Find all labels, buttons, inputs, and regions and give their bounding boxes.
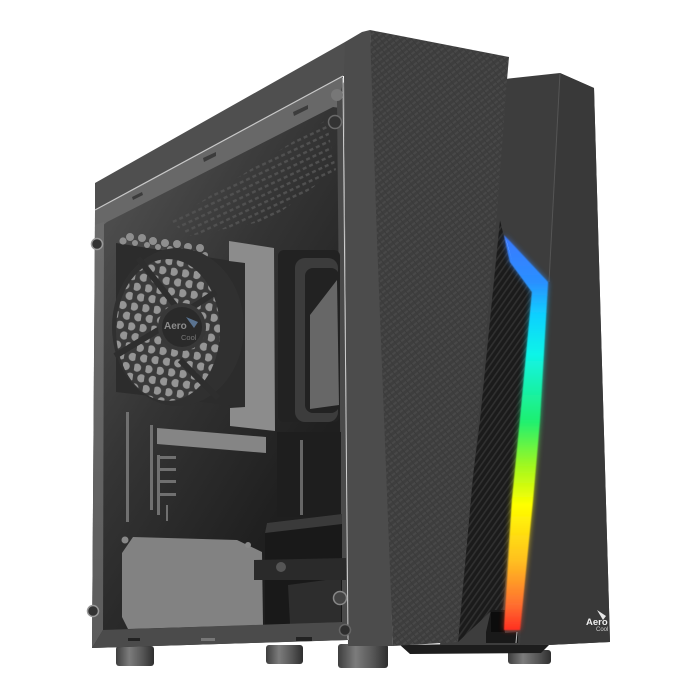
right frame [337, 82, 348, 640]
drive cage [254, 514, 346, 626]
light glow [504, 235, 548, 630]
logo: Aerocool front: Aero [586, 617, 608, 628]
right front panel [440, 73, 610, 645]
front intake frame [278, 250, 340, 422]
dark base under light bar [486, 610, 518, 643]
top frame strip [95, 76, 343, 232]
fan logo [164, 317, 198, 342]
bottom frame [92, 622, 348, 648]
illustration: PC tower case [86, 30, 610, 668]
front pillar [344, 30, 393, 646]
seam line [549, 73, 560, 282]
fan mount plate [116, 243, 245, 407]
logo: Aerocool front [586, 610, 608, 633]
perforated top panel [170, 120, 336, 236]
fan [112, 248, 220, 401]
lower right panel [277, 432, 341, 517]
fan grille holes [116, 259, 220, 401]
expansion slot lines [126, 412, 176, 522]
left frame [92, 222, 104, 648]
drive bay cutout [122, 537, 263, 629]
fan logo: Aero [164, 321, 187, 332]
thumbscrews [88, 89, 350, 636]
feet [116, 644, 551, 668]
light strip [504, 235, 548, 630]
glass side panel [92, 76, 348, 648]
cutout bar [229, 241, 275, 431]
top side band [95, 42, 345, 211]
expansion slot cover [157, 428, 266, 453]
RGB light bar [504, 235, 548, 643]
vent holes above fan [119, 233, 208, 258]
front carbon panel [370, 30, 509, 646]
logo: Aerocool front: Cool [596, 627, 608, 633]
base plinth [400, 642, 609, 654]
fan hub [158, 303, 206, 351]
fan logo: Cool [181, 333, 197, 342]
fan spokes [115, 258, 218, 398]
dark carbon wedge [458, 220, 532, 642]
